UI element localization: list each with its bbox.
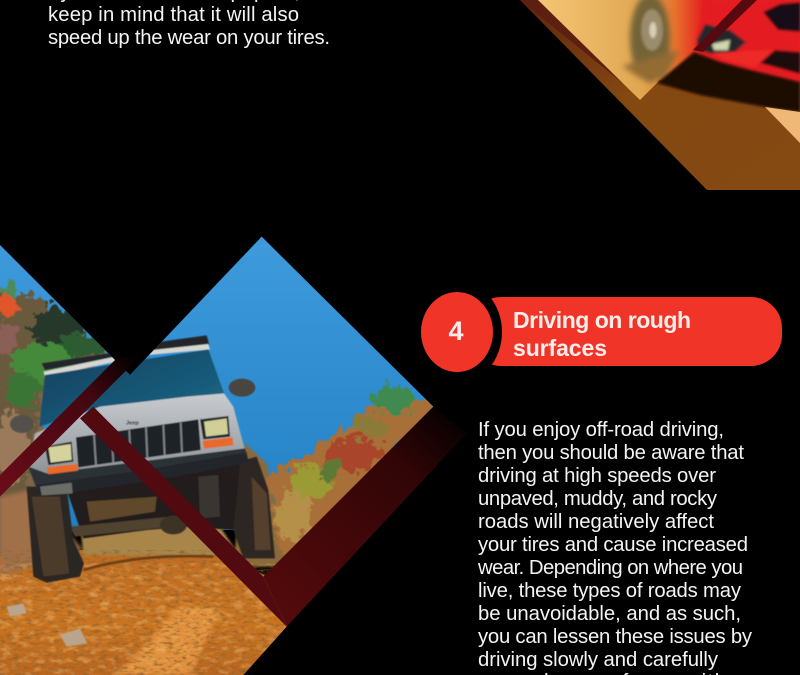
text block: off-road driving advice: If you enjoy off-road driving,: [478, 419, 724, 441]
stripe crossing the jeep, rising right: [0, 353, 143, 497]
jeep: [10, 335, 275, 583]
dark red stripe: [693, 0, 757, 52]
number badge: [421, 292, 493, 372]
road: [0, 547, 300, 675]
text block: off-road driving advice: roads will negatively affect: [478, 511, 714, 533]
badge: Jeep: [126, 420, 139, 426]
text block: off-road driving advice: live, these types of roads may: [478, 580, 742, 602]
photo: red car in diamond crop: [520, 0, 800, 190]
roof: [43, 357, 117, 377]
brush behind right tire: [234, 442, 283, 568]
road highlight: [765, 107, 800, 143]
lower body: [28, 448, 248, 493]
text block: off-road driving advice: [477, 419, 753, 675]
undercarriage: [67, 463, 240, 538]
text block: off-road driving advice: your tires and cause increased: [478, 534, 748, 556]
car shadow: [657, 52, 800, 112]
heading: Driving on rough surfaces: [410, 280, 782, 384]
text block: off-road driving advice: driving at high speeds over: [478, 465, 716, 487]
text block: tire wear intro: [48, 0, 330, 49]
stripe crossing the jeep, falling right: [80, 407, 287, 627]
text block: off-road driving advice: then you should be aware that: [478, 442, 744, 464]
heading pill: [470, 297, 782, 366]
heading text: Driving on rough: [513, 307, 691, 333]
wide dark red stripe: [263, 407, 467, 627]
road texture: [0, 550, 293, 675]
circle separator: [410, 280, 502, 384]
wheel and dust: [622, 0, 680, 82]
text block: tire wear intro: speed up the wear on your tires.: [48, 27, 330, 49]
left tire: [27, 487, 84, 583]
roof rack: [42, 353, 115, 370]
text block: off-road driving advice: be unavoidable, and as such,: [478, 603, 741, 625]
right tire: [232, 457, 275, 558]
grille: [76, 419, 201, 467]
headlights: [200, 416, 230, 439]
sky: [0, 230, 450, 530]
text block: off-road driving advice: you can lessen these issues by: [478, 626, 753, 648]
text block: off-road driving advice: unpaved, muddy, and rocky: [478, 488, 718, 510]
text block: tire wear intro: keep in mind that it will also: [48, 4, 299, 26]
hillside backing: [0, 310, 105, 557]
text block: off-road driving advice: wear. Depending on where you: [477, 557, 743, 579]
windshield: [39, 349, 224, 427]
heading text: surfaces: [513, 335, 607, 361]
foliage right: [267, 387, 440, 567]
turn signals: [203, 437, 233, 449]
bumper: [37, 453, 248, 495]
mirrors: [229, 379, 255, 397]
text block: off-road driving advice: driving slowly and carefully: [478, 649, 719, 671]
hood and body: [28, 393, 245, 473]
hillside foliage left: [0, 284, 113, 503]
photo: jeep on a dirt road in diamond crop: [0, 230, 467, 675]
number: 4: [448, 316, 464, 346]
car body: [694, 0, 800, 82]
